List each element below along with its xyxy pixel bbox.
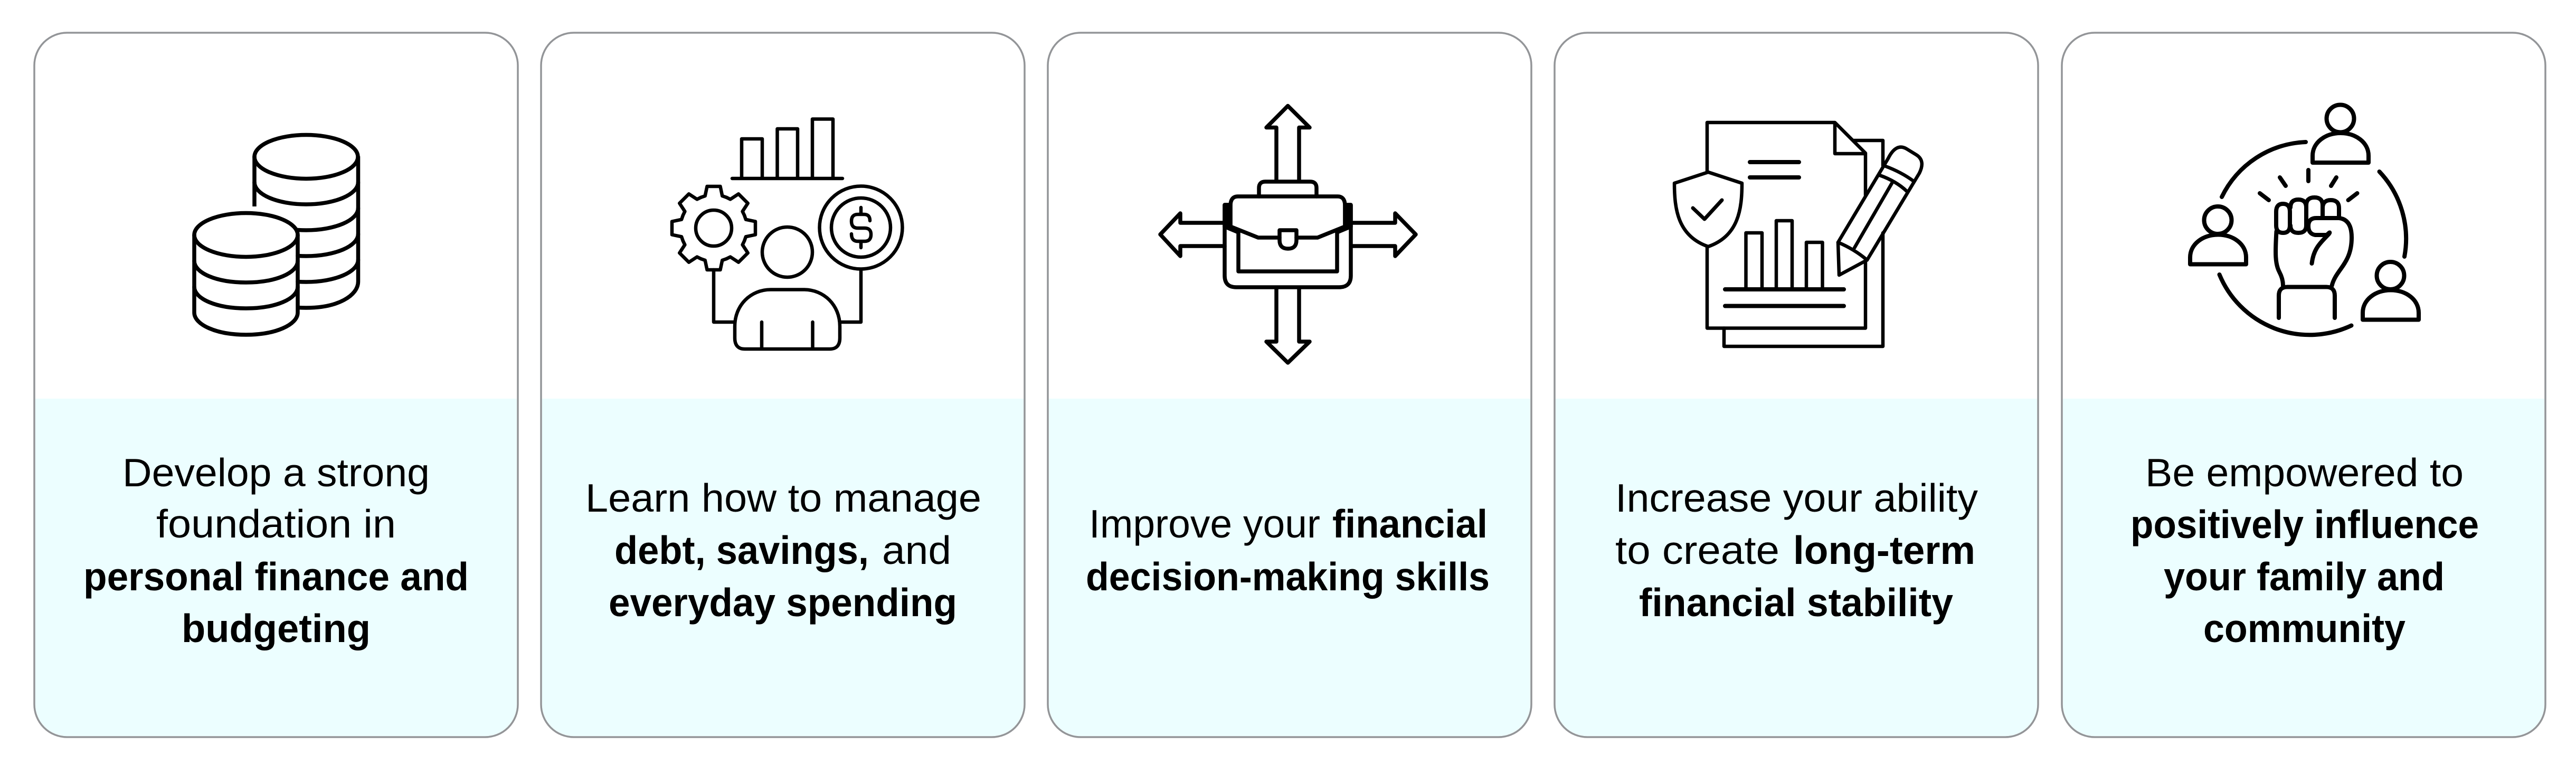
rays [2260,170,2357,200]
card 3 background [1048,33,1531,737]
panel: card 2 manage debt and savings [541,33,1025,737]
card 1 text: budgeting [182,606,371,651]
card 2 text [585,476,981,625]
small bar chart [1746,221,1822,289]
card 5 text: your family and [2164,554,2445,599]
card 4 text: long-term [1793,528,1975,572]
shield with check [1674,172,1742,247]
card 1 background [34,33,518,737]
panel: card 4 financial stability [1555,33,2038,737]
coin with dollar sign [819,186,903,269]
icon: stacked coins [194,135,358,335]
panel: card 3 decision-making [1048,33,1531,737]
card 2 text: everyday spending [609,580,957,625]
briefcase body [1225,205,1351,287]
connectors [714,269,861,322]
card 1 text [83,450,469,651]
circle arcs [2219,142,2406,335]
back document [1724,140,1883,346]
card 5 text: Be empowered to [2145,450,2464,495]
card 2 text: Learn how to manage [585,476,981,520]
briefcase handle [1259,182,1317,196]
card 5 background [2062,33,2545,737]
card 4 text [1615,476,1978,625]
clasp [1280,230,1296,249]
card 2 text: debt, savings, [614,528,869,572]
card 2 text: and [882,528,951,572]
card 3 text: financial [1332,502,1488,546]
card 5 text: community [2203,606,2405,651]
front document [1707,122,1865,328]
person [762,227,812,277]
icon: briefcase with four arrows [1160,106,1416,363]
person top [2313,105,2369,163]
card 1 text: Develop a strong [122,450,430,495]
card 5 text [2130,450,2479,651]
card 1 text: personal finance and [83,554,469,599]
card 3 text [1086,502,1490,599]
arrows [1266,106,1310,180]
card 4 text: to create [1615,528,1779,572]
person left [2190,206,2246,264]
panel: card 1 personal finance [34,33,518,737]
briefcase flap [1226,196,1350,238]
card 5 text: positively influence [2130,502,2479,546]
pencil [1838,147,1922,275]
icon: person with chart, gear and coin [672,119,903,349]
text lines [1725,162,1844,306]
icon: documents, shield and pencil [1674,122,1922,346]
card 4 text: Increase your ability [1615,476,1978,520]
bar chart [732,119,842,178]
gear [672,186,755,270]
panel: card 5 community empowerment [2062,33,2545,737]
card 3 text: decision-making skills [1086,554,1490,599]
card 2 background [541,33,1025,737]
icon: raised fist with three people [2190,105,2419,335]
pocket [1238,232,1337,271]
card 3 text: Improve your [1089,502,1320,546]
fist [2276,204,2290,233]
card 4 text: financial stability [1639,580,1953,625]
cuff [2279,287,2335,318]
card 4 background [1555,33,2038,737]
card 1 text: foundation in [156,502,396,546]
person right [2363,262,2419,320]
